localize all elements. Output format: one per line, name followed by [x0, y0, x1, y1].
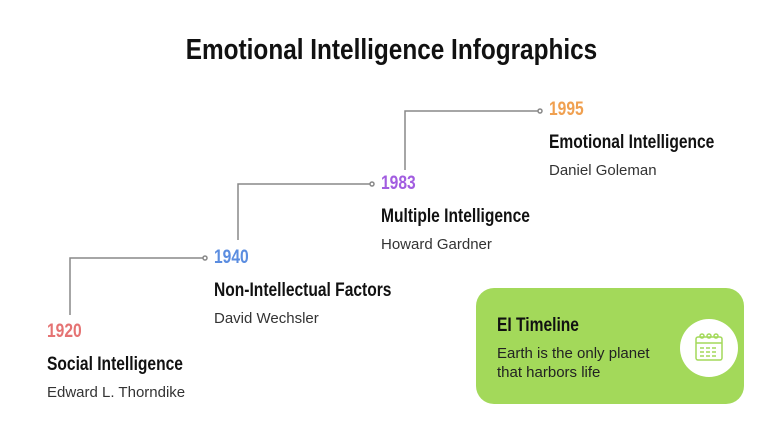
milestone 1983 — [381, 173, 530, 253]
milestone 1920: 1920 — [47, 321, 82, 342]
callout: EI Timeline: that harbors life — [497, 364, 600, 381]
milestone 1920 — [47, 321, 185, 401]
milestone 1940 — [214, 247, 391, 327]
title: Emotional Intelligence Infographics — [186, 34, 597, 66]
milestone 1983: 1983 — [381, 173, 416, 194]
milestone 1995: 1995 — [549, 99, 584, 120]
callout: EI Timeline: Earth is the only planet — [497, 345, 650, 362]
milestone 1983: Howard Gardner — [381, 236, 492, 253]
icon: calendar — [680, 319, 738, 377]
milestone 1940: David Wechsler — [214, 310, 319, 327]
callout: EI Timeline: EI Timeline — [497, 315, 579, 336]
milestone 1920: Social Intelligence — [47, 354, 183, 375]
milestone 1940: Non-Intellectual Factors — [214, 280, 391, 301]
milestone 1995: Emotional Intelligence — [549, 132, 714, 153]
callout: EI Timeline — [476, 288, 744, 404]
milestone 1995 — [549, 99, 714, 179]
milestone 1995: Daniel Goleman — [549, 162, 657, 179]
milestone 1920: Edward L. Thorndike — [47, 384, 185, 401]
milestone 1940: 1940 — [214, 247, 249, 268]
milestone 1983: Multiple Intelligence — [381, 206, 530, 227]
